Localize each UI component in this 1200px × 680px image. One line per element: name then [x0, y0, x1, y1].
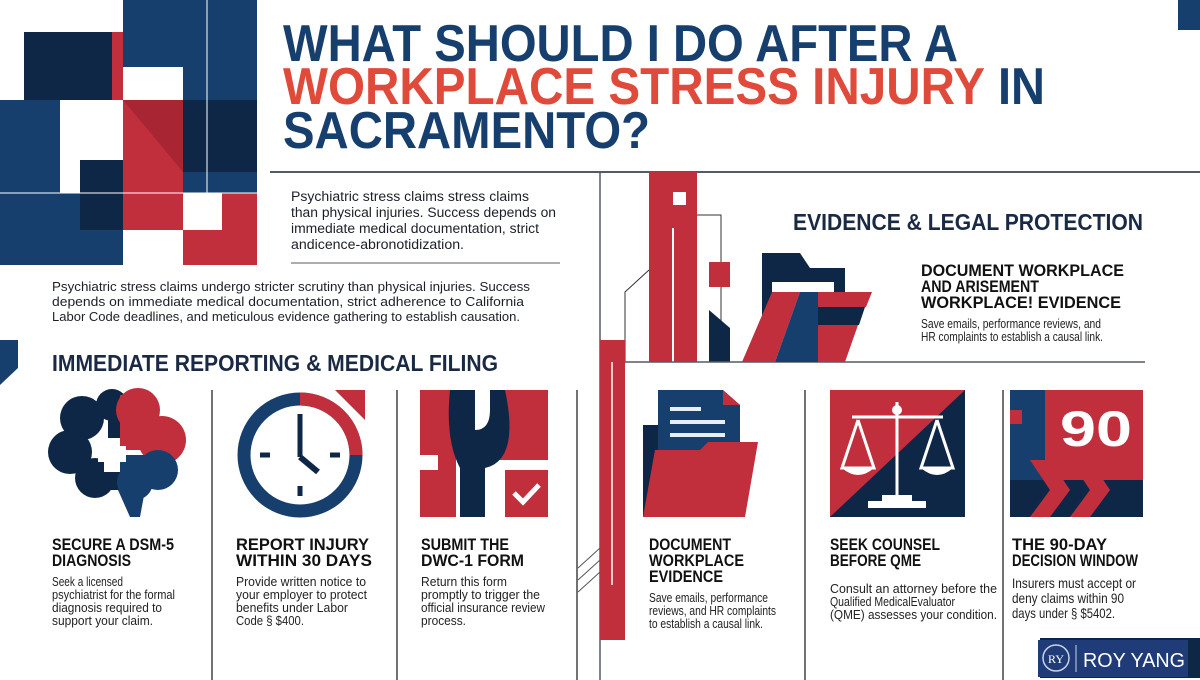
- heading: immediate reporting: IMMEDIATE REPORTING & MEDICAL FILING: [52, 350, 498, 376]
- title: IN: [998, 58, 1045, 116]
- evidence callout text: Save emails, performance reviews, and: [921, 317, 1101, 331]
- icon: clock: [244, 390, 365, 511]
- card text: DWC-1: promptly to trigger the: [421, 588, 540, 602]
- card text: counsel: Qualified MedicalEvaluator: [830, 595, 955, 609]
- card text: DWC-1: [421, 535, 546, 628]
- card text: document evidence: Save emails, performance: [649, 591, 768, 605]
- card text: counsel: [830, 535, 997, 622]
- card text: document evidence: EVIDENCE: [649, 567, 723, 586]
- card text: DSM-5: Seek a licensed: [52, 575, 123, 589]
- card text: DWC-1: DWC-1 FORM: [421, 551, 524, 570]
- card text: DSM-5: support your claim.: [52, 614, 153, 628]
- icon: brain with cross: [48, 388, 186, 517]
- logo: [1038, 638, 1200, 678]
- card text: counsel: (QME) assesses your condition.: [830, 608, 997, 622]
- card text: document evidence: DOCUMENT: [649, 535, 732, 554]
- summary text: [52, 279, 531, 324]
- card text: 30 days: your employer to protect: [236, 588, 367, 602]
- card text: DWC-1: Return this form: [421, 575, 507, 589]
- logo: RY: [1048, 652, 1064, 666]
- card text: DWC-1: SUBMIT THE: [421, 535, 509, 554]
- card text: document evidence: to establish a causal link.: [649, 617, 763, 631]
- building decoration: [625, 172, 730, 362]
- title: WHAT SHOULD I DO AFTER A: [283, 15, 958, 73]
- card text: 30 days: benefits under Labor: [236, 601, 348, 615]
- card text: DSM-5: diagnosis required to: [52, 601, 162, 615]
- card text: 90-day: THE 90-DAY: [1012, 535, 1108, 554]
- card text: document evidence: reviews, and HR complaints: [649, 604, 776, 618]
- card text: document evidence: [649, 535, 776, 631]
- icon: folder large: [742, 253, 872, 362]
- card text: counsel: SEEK COUNSEL: [830, 535, 940, 554]
- summary text: Labor Code deadlines, and meticulous evidence gathering to establish causation.: [52, 309, 520, 324]
- title: [283, 15, 1045, 160]
- card text: 30 days: REPORT INJURY: [236, 535, 370, 554]
- card text: DSM-5: [52, 535, 175, 628]
- card text: 30 days: Provide written notice to: [236, 575, 366, 589]
- title: SACRAMENTO?: [283, 102, 650, 160]
- summary text: depends on immediate medical documentation, strict adherence to California: [52, 294, 525, 309]
- column dividers: [212, 390, 1003, 680]
- red vertical bar: [578, 340, 625, 640]
- card text: DWC-1: process.: [421, 614, 466, 628]
- card text: document evidence: WORKPLACE: [649, 551, 744, 570]
- logo: ROY YANG: [1083, 650, 1185, 672]
- card text: 90-day: Insurers must accept or: [1012, 575, 1136, 591]
- intro text block: immediate medical documentation, strict: [291, 221, 539, 236]
- evidence callout text: [921, 261, 1124, 344]
- intro text block: Psychiatric stress claims stress claims: [291, 189, 529, 204]
- card text: 30 days: WITHIN 30 DAYS: [236, 551, 372, 570]
- card text: DWC-1: official insurance review: [421, 601, 546, 615]
- intro text block: andicence-abronotidization.: [291, 237, 464, 252]
- mosaic decoration: [0, 0, 1200, 385]
- card text: 90-day: deny claims within 90: [1012, 590, 1124, 606]
- heading: evidence: EVIDENCE & LEGAL PROTECTION: [793, 209, 1143, 235]
- icon: scales: [830, 390, 965, 517]
- icon: 90-day: 90: [1060, 401, 1132, 457]
- intro text block: [291, 189, 556, 252]
- summary text: Psychiatric stress claims undergo stricter scrutiny than physical injuries. Success: [52, 279, 531, 294]
- icon: document folder: [643, 390, 758, 517]
- card text: counsel: BEFORE QME: [830, 551, 921, 570]
- card text: 90-day: DECISION WINDOW: [1012, 551, 1139, 570]
- icon: 90-day: [1010, 390, 1143, 517]
- card text: counsel: Consult an attorney before the: [830, 582, 997, 596]
- intro text block: than physical injuries. Success depends on: [291, 205, 556, 220]
- title: WORKPLACE STRESS INJURY: [283, 58, 985, 116]
- card text: DSM-5: SECURE A DSM-5: [52, 535, 174, 554]
- card text: 90-day: [1012, 535, 1139, 621]
- evidence callout text: HR complaints to establish a causal link.: [921, 330, 1103, 344]
- evidence callout text: WORKPLACE! EVIDENCE: [921, 293, 1121, 312]
- card text: 30 days: Code § $400.: [236, 614, 304, 628]
- card text: 30 days: [236, 535, 372, 628]
- card text: DSM-5: DIAGNOSIS: [52, 551, 131, 570]
- evidence callout text: DOCUMENT WORKPLACE: [921, 261, 1124, 280]
- evidence callout text: AND ARISEMENT: [921, 277, 1040, 296]
- card text: 90-day: days under § $5402.: [1012, 605, 1115, 621]
- icon: DWC-1 form: [420, 390, 548, 517]
- card text: DSM-5: psychiatrist for the formal: [52, 588, 175, 602]
